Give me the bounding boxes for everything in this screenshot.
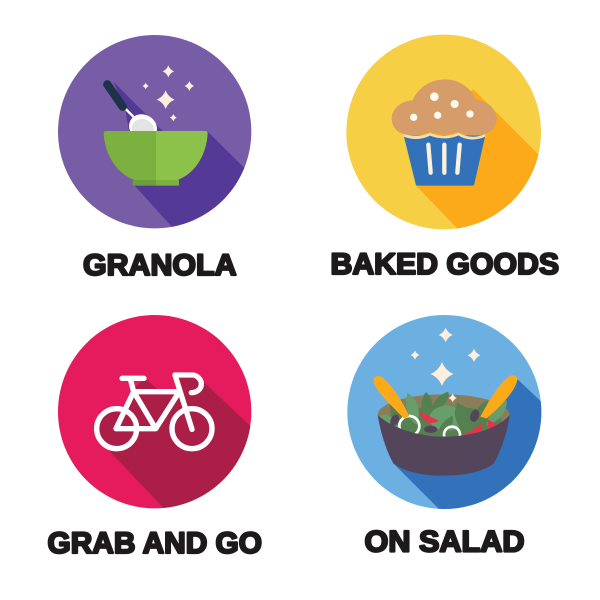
salad greens <box>379 392 507 437</box>
muffin cup <box>404 135 485 186</box>
cup stripes <box>428 145 460 173</box>
long shadow <box>408 90 538 228</box>
sparkles <box>142 65 194 121</box>
handlebar <box>175 375 201 393</box>
sparkles <box>411 328 480 402</box>
heading: baked goods: BAKED GOODS <box>330 248 559 281</box>
heading: grab and go: GRAB AND GO <box>48 527 262 560</box>
long shadow <box>394 380 542 509</box>
frame <box>116 375 192 429</box>
icon: bicycle <box>97 375 212 449</box>
long shadow <box>99 378 250 508</box>
heading: on salad: ON SALAD <box>364 526 524 558</box>
panel: granola <box>58 35 252 228</box>
long shadow <box>114 82 244 227</box>
heading: granola: GRANOLA <box>83 249 236 282</box>
wheels <box>97 409 212 449</box>
icon: bowl <box>104 131 208 186</box>
circle background <box>58 315 251 508</box>
circle background <box>347 315 541 509</box>
muffin top <box>392 79 497 136</box>
salad servers <box>373 375 517 419</box>
tomatoes <box>419 411 502 435</box>
bowl <box>378 415 510 476</box>
panel: baked goods <box>346 34 541 230</box>
icon: muffin <box>392 79 497 186</box>
sprinkles <box>410 92 474 121</box>
circle background <box>58 35 251 228</box>
panel: on salad <box>347 315 542 509</box>
onion rings <box>398 414 462 436</box>
bowl interior <box>378 394 510 436</box>
panel: grab and go <box>58 315 252 508</box>
olives <box>389 408 481 433</box>
infographic <box>48 34 559 554</box>
icon rim <box>403 133 485 140</box>
icon: spoon <box>103 80 157 131</box>
circle background <box>346 35 541 229</box>
